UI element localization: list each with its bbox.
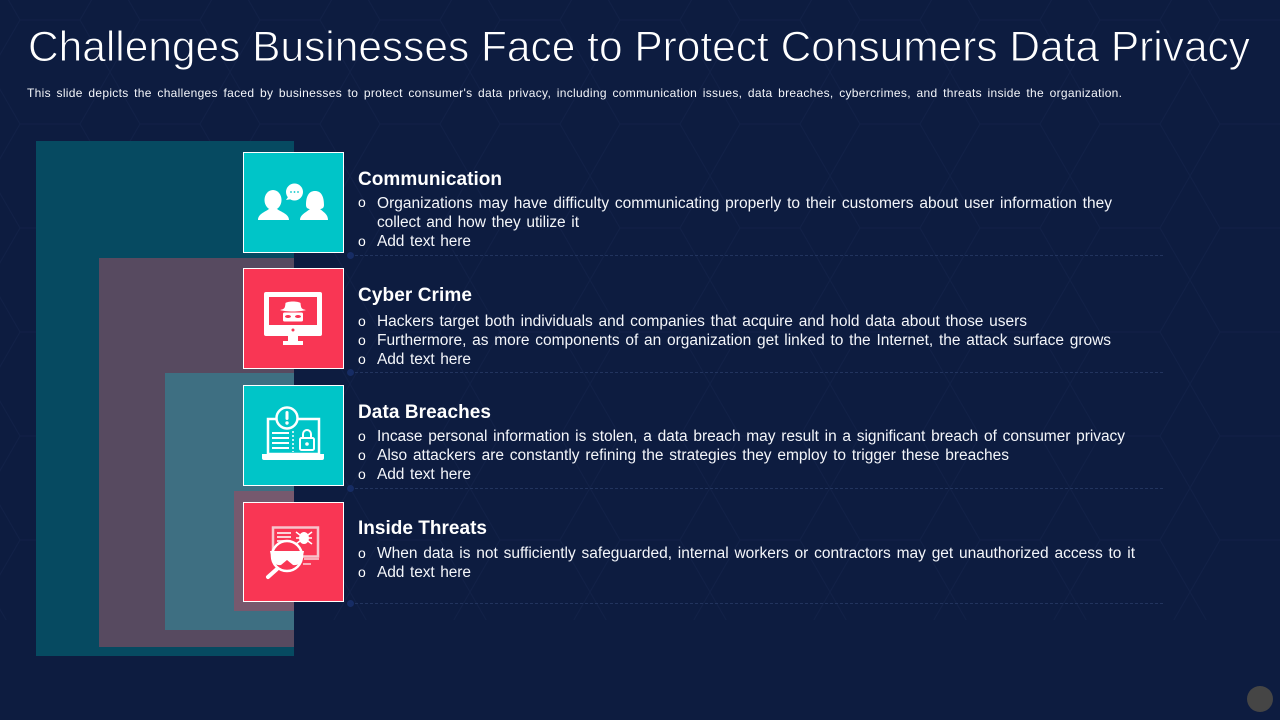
bullet list: Add text here — [377, 233, 471, 250]
title: Challenges Businesses Face to Protect Consumers Data Privacy — [28, 23, 1250, 71]
heading: Cyber Crime — [358, 285, 472, 306]
bullet list: o — [358, 466, 366, 482]
bullet list: o — [358, 447, 366, 463]
heading: Data Breaches — [358, 402, 491, 423]
bullet list: Add text here — [377, 466, 471, 483]
bullet list — [358, 194, 1112, 250]
heading: Inside Threats — [358, 518, 487, 539]
nested background panels — [36, 141, 294, 656]
bullet list: When data is not sufficiently safeguarded, internal workers or contractors may get unauthorized access to it — [377, 545, 1136, 562]
bullet list: Hackers target both individuals and companies that acquire and hold data about those users — [377, 313, 1027, 330]
panel: communication — [244, 152, 1112, 252]
bullet list — [358, 545, 1136, 581]
panel: inside threats — [244, 502, 1136, 602]
icon: screen with bug and magnifier — [244, 502, 344, 602]
bullet list: Add text here — [377, 564, 471, 581]
bullet list: o — [358, 545, 366, 561]
panel: data breaches — [244, 386, 1125, 486]
bullet list: o — [358, 233, 366, 249]
bullet list: Also attackers are constantly refining the strategies they employ to trigger these breaches — [377, 447, 1009, 464]
bullet list: o — [358, 313, 366, 329]
bullet list: Furthermore, as more components of an organization get linked to the Internet, the attack surface grows — [377, 332, 1111, 349]
subtitle description: This slide depicts the challenges faced by businesses to protect consumer's data privacy, including communication issues, data breaches, cybercrimes, and threats inside the organization. — [27, 86, 1122, 100]
panel: cyber crime — [244, 268, 1111, 368]
bullet list — [358, 313, 1111, 368]
bullet list: collect and how they utilize it — [377, 214, 580, 231]
bullet list: Incase personal information is stolen, a data breach may result in a significant breach of consumer privacy — [377, 428, 1125, 445]
icon: monitor with hacker — [244, 268, 344, 368]
bullet list: o — [358, 564, 366, 580]
bullet list: o — [358, 194, 366, 210]
bullet list — [358, 428, 1125, 483]
icon: two people talking — [244, 152, 344, 252]
heading: Communication — [358, 169, 502, 190]
icon: laptop with alert and lock — [244, 386, 344, 486]
bullet list: o — [358, 351, 366, 367]
bullet list: o — [358, 332, 366, 348]
bullet list: Organizations may have difficulty communicating properly to their customers about user information they — [377, 195, 1112, 212]
bullet list: o — [358, 428, 366, 444]
bullet list: Add text here — [377, 351, 471, 368]
corner circle — [1247, 686, 1273, 712]
